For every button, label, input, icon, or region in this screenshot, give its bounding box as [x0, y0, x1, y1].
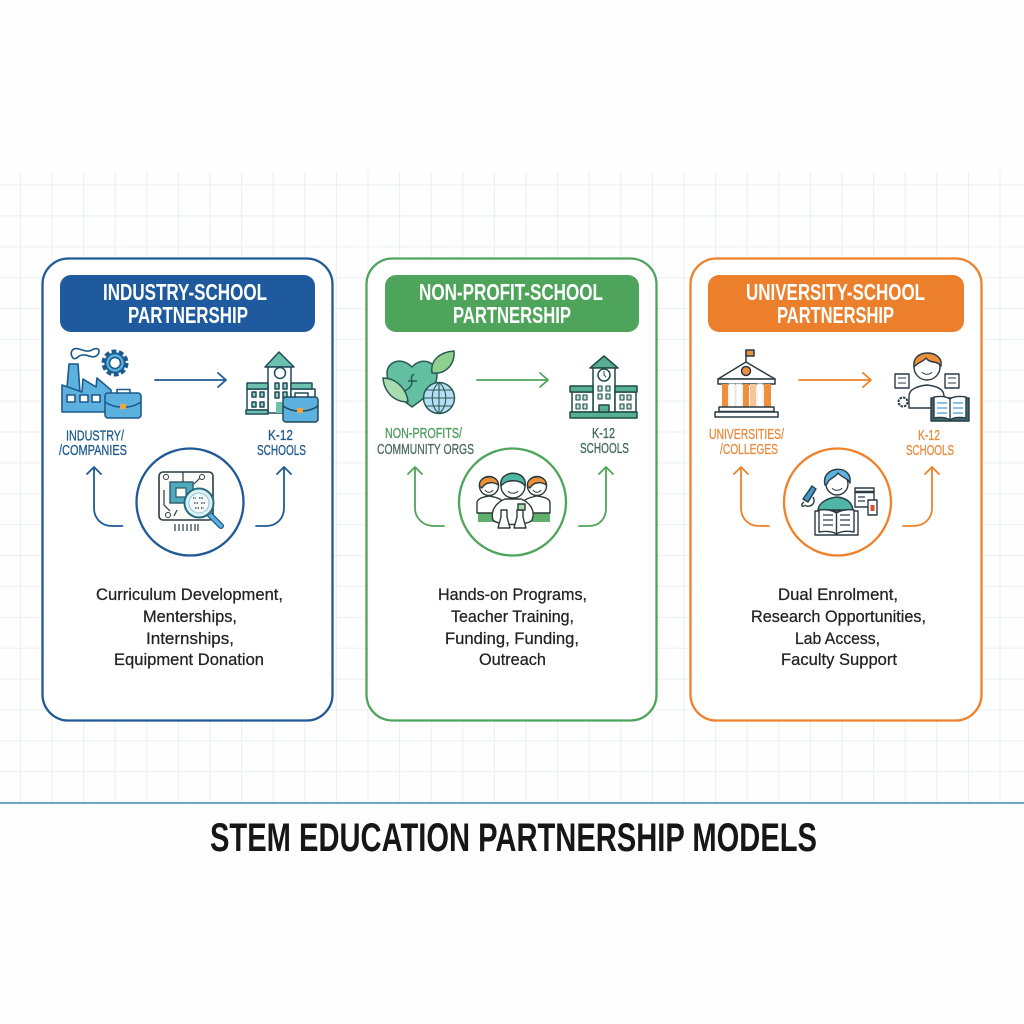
label: schools: SCHOOLS — [580, 440, 629, 457]
text: activities: Outreach — [479, 650, 546, 669]
panel: non-profit-school partnership — [366, 258, 656, 720]
feedback arrow left — [87, 467, 122, 526]
text: activities: Menterships, — [143, 607, 237, 626]
label: industry: INDUSTRY/ — [66, 428, 125, 444]
feedback arrow right — [256, 467, 291, 526]
text: activities: Faculty Support — [781, 650, 897, 669]
circle: student reading icon — [784, 448, 891, 556]
text: activities: Research Opportunities, — [751, 607, 926, 626]
text: activities: Equipment Donation — [114, 650, 264, 669]
label: k-12: K-12 — [268, 427, 293, 444]
title: STEM EDUCATION PARTNERSHIP MODELS — [210, 816, 817, 860]
heading: industry-school partnership: PARTNERSHIP — [128, 302, 248, 328]
text: activities: Lab Access, — [795, 629, 880, 648]
text: activities: Teacher Training, — [451, 607, 574, 626]
label: colleges: /COLLEGES — [720, 441, 778, 458]
flow arrow: non-profits to schools — [477, 373, 548, 387]
label: universities: UNIVERSITIES/ — [709, 426, 785, 443]
text: activities: Internships, — [146, 629, 234, 648]
label: k-12: K-12 — [592, 425, 615, 442]
label: non-profits: NON-PROFITS/ — [385, 425, 463, 442]
heading: university-school partnership — [708, 275, 964, 332]
heading: industry-school partnership — [60, 275, 315, 332]
label: k-12: K-12 — [918, 427, 940, 444]
feedback arrow left — [408, 467, 444, 526]
text: activities: Funding, Funding, — [445, 629, 579, 648]
label: community orgs: COMMUNITY ORGS — [377, 441, 474, 458]
text: activities: Hands-on Programs, — [438, 585, 587, 604]
icon: school — [570, 356, 637, 418]
text: activities: Dual Enrolment, — [778, 585, 898, 604]
circle: students icon — [459, 448, 566, 556]
text: activities — [438, 585, 587, 669]
label: schools: SCHOOLS — [257, 442, 306, 459]
label: companies: /COMPANIES — [59, 442, 127, 459]
circle: circuit and magnifier icon — [136, 448, 244, 556]
icon: school with briefcase — [246, 352, 318, 422]
heading: university-school partnership: PARTNERSHIP — [777, 302, 894, 328]
feedback arrow right — [579, 467, 613, 526]
heading: industry-school partnership: INDUSTRY-SCHOOL — [103, 279, 267, 305]
panel: industry-school partnership — [42, 258, 332, 720]
text: activities — [96, 585, 283, 669]
text: activities — [751, 585, 926, 669]
heading: non-profit-school partnership — [385, 275, 639, 332]
panel frame — [690, 258, 982, 720]
icon: university building — [715, 350, 778, 417]
panel frame — [42, 258, 332, 720]
heading: university-school partnership: UNIVERSITY-SCHOOL — [746, 279, 925, 305]
heading: non-profit-school partnership: NON-PROFIT-SCHOOL — [419, 279, 603, 305]
icon: teacher with book — [895, 353, 969, 421]
icon: heart, leaves and globe — [383, 351, 454, 414]
panel frame — [366, 258, 656, 720]
label: schools: SCHOOLS — [906, 442, 954, 459]
icon: factory, gear and briefcase — [62, 349, 141, 418]
panel: university-school partnership — [690, 258, 982, 720]
feedback arrow right — [903, 467, 939, 526]
heading: non-profit-school partnership: PARTNERSHIP — [453, 302, 571, 328]
text: activities: Curriculum Development, — [96, 585, 283, 604]
flow arrow: industry to schools — [155, 373, 226, 387]
flow arrow: universities to schools — [799, 373, 871, 387]
feedback arrow left — [734, 467, 769, 526]
